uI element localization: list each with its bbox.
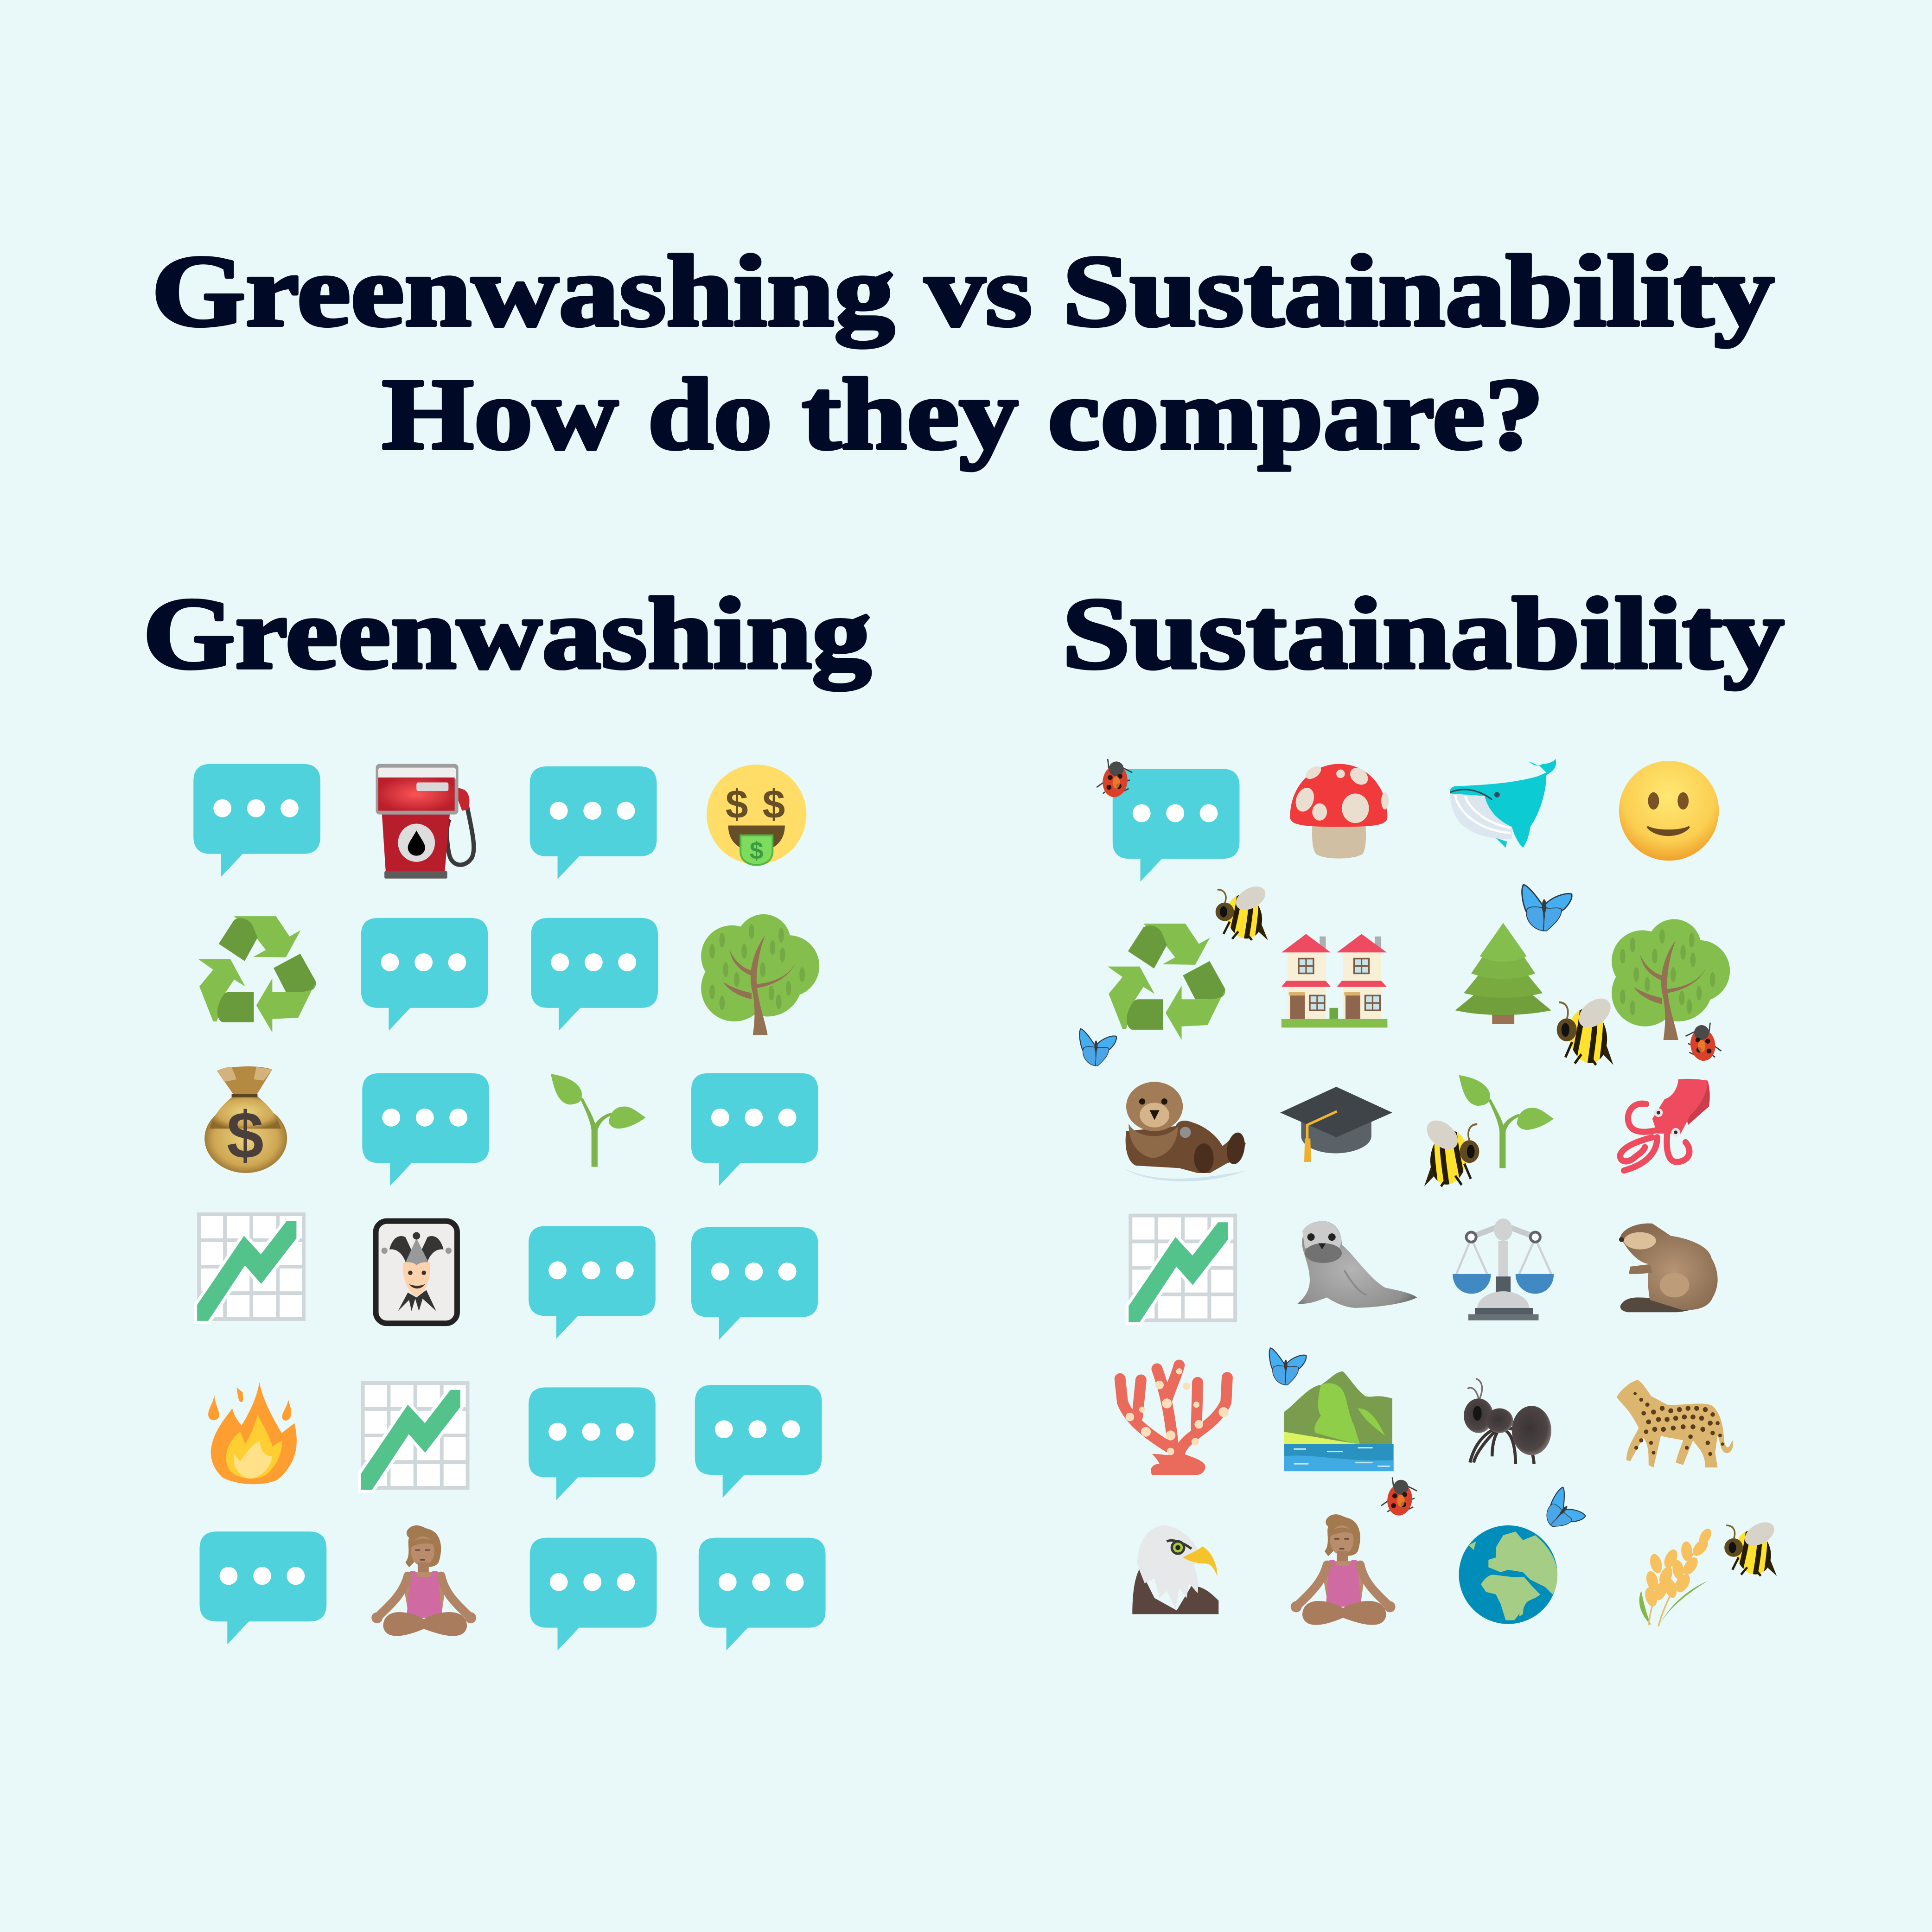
icon: honeybee [1724,1518,1778,1580]
icon: eagle [1132,1525,1218,1614]
icon: beaver [1619,1224,1718,1312]
icon: graduation cap [1280,1087,1392,1162]
icon: earth globe [1459,1525,1557,1624]
icon: money mouth face: $ [763,782,785,827]
icon: island landscape [1284,1371,1394,1471]
icon: recycling symbol [198,916,316,1033]
title: Greenwashing vs Sustainability [152,234,1774,348]
icon: coral [1120,1365,1229,1475]
panel: greenwashing icon grid [193,764,826,1651]
icon: fuel pump [376,764,474,879]
icon: person meditating [371,1525,476,1636]
icon: speech bubble [699,1538,826,1651]
icon: speech bubble [361,918,488,1031]
icon: sea otter [1124,1082,1247,1181]
icon: speech bubble [529,1226,656,1339]
icon: seedling [1459,1075,1554,1168]
icon: speech bubble [529,1387,656,1500]
panel: sustainability icon grid [1079,759,1778,1626]
icon: ladybug [1381,1477,1417,1517]
icon: speech bubble [193,764,320,877]
icon: whale [1450,759,1556,848]
icon: money mouth face [707,765,806,865]
icon: squid [1620,1079,1710,1171]
icon: fire [208,1383,297,1484]
icon: butterfly [1538,1486,1590,1538]
icon: speech bubble [530,1538,657,1651]
icon: butterfly [1079,1029,1116,1066]
icon: chart with upward trend [1129,1215,1236,1322]
heading: Sustainability: Sustainability [1062,576,1784,690]
icon: leopard [1617,1380,1733,1467]
icon: seedling [551,1074,646,1167]
icon: recycling symbol [1108,924,1225,1040]
heading: Greenwashing: Greenwashing [143,576,871,690]
icon: evergreen tree [1455,923,1551,1024]
icon: joker card [376,1221,457,1323]
icon: balance scale [1453,1218,1554,1320]
icon: money mouth face: $ [726,782,748,827]
icon: speech bubble [200,1531,326,1644]
icon: seal [1297,1221,1417,1308]
icon: chart with upward trend [197,1214,304,1321]
icon: houses [1282,934,1387,1027]
icon: speech bubble [691,1227,818,1340]
title: How do they compare? [382,357,1544,471]
icon: speech bubble [691,1073,818,1186]
icon: deciduous tree [701,914,819,1035]
icon: honeybee [1557,993,1615,1070]
icon: ladybug [1685,1023,1722,1062]
icon: mushroom [1290,764,1389,859]
icon: smiling face [1619,761,1719,861]
icon: honeybee [1422,1115,1479,1191]
icon: butterfly [1269,1348,1306,1385]
icon: chart with upward trend [361,1383,468,1490]
icon: money bag: $ [227,1098,264,1173]
icon: ladybug [1097,759,1132,799]
icon: speech bubble [531,918,658,1031]
icon: speech bubble [1113,769,1239,881]
icon: sheaf of rice [1639,1527,1714,1626]
icon: money bag [204,1066,287,1173]
icon: speech bubble [695,1385,822,1498]
icon: person meditating [1291,1514,1396,1625]
icon: butterfly [1522,885,1572,931]
icon: speech bubble [530,766,657,879]
icon: money mouth face: $ [750,837,764,864]
icon: honeybee [1216,882,1269,944]
icon: ant [1464,1379,1551,1464]
icon: speech bubble [362,1073,489,1186]
title [152,234,1774,471]
icon: deciduous tree [1612,919,1730,1040]
